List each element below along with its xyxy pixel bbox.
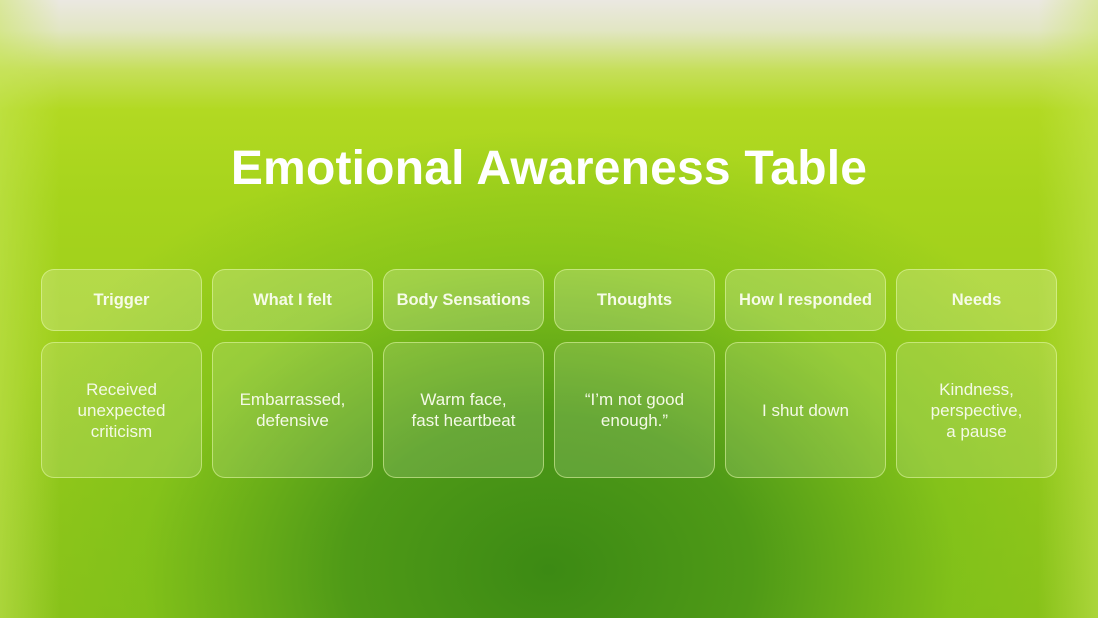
cell: felt: Embarrassed, <box>240 390 345 409</box>
cell: responded <box>725 342 886 478</box>
header: What I felt: What I felt <box>253 290 332 308</box>
header: How I responded <box>725 269 886 331</box>
cell: trigger: unexpected <box>78 400 165 420</box>
cell: felt <box>212 342 373 478</box>
cell: body <box>383 342 544 478</box>
cell: thoughts: “I’m not good <box>585 390 684 409</box>
cell: felt: defensive <box>256 411 329 430</box>
cell: trigger: criticism <box>91 422 152 440</box>
header: Body Sensations <box>383 269 544 331</box>
header: Thoughts: Thoughts <box>597 290 672 308</box>
cell: trigger: Received <box>86 380 157 398</box>
header: Needs <box>896 269 1057 331</box>
cell: needs: Kindness, <box>939 380 1014 398</box>
cell: trigger <box>41 342 202 478</box>
header: Body Sensations: Body Sensations <box>397 290 530 308</box>
cell: thoughts: enough.” <box>601 411 668 430</box>
header: Trigger <box>41 269 202 331</box>
header: How I responded: How I responded <box>739 290 872 308</box>
header: Thoughts <box>554 269 715 331</box>
cell: responded: I shut down <box>762 400 849 420</box>
cell: body: fast heartbeat <box>412 411 515 430</box>
title: Emotional Awareness Table <box>231 142 867 195</box>
cell: needs <box>896 342 1057 478</box>
cell: needs: perspective, <box>931 400 1022 420</box>
cell: body: Warm face, <box>420 390 507 409</box>
cell: needs: a pause <box>946 422 1007 440</box>
cell: thoughts <box>554 342 715 478</box>
header: Needs: Needs <box>952 290 1001 308</box>
header: What I felt <box>212 269 373 331</box>
header: Trigger: Trigger <box>94 290 149 308</box>
